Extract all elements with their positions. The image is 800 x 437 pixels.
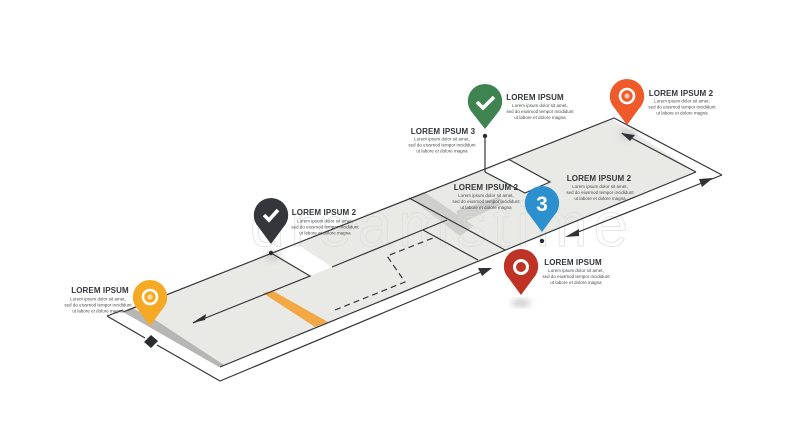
label: dark pin: ut labore et dolore magna bbox=[299, 230, 351, 236]
label: centre plot: Lorem ipsum dolor sit amet, bbox=[458, 193, 514, 198]
label: yellow pin: LOREM IPSUM bbox=[71, 286, 129, 295]
label: yellow pin: ut labore et dolore magna bbox=[72, 308, 124, 314]
label: lorem ipsum 3: Lorem ipsum dolor sit amet, bbox=[414, 136, 470, 142]
soft shadow near dark pin bbox=[265, 251, 281, 261]
label: orange pin: LOREM IPSUM 2 bbox=[649, 89, 714, 98]
label: red pin: sed do eiusmod tempor incididunt bbox=[542, 274, 610, 279]
watermark outline text: dreamstime bbox=[250, 191, 630, 260]
label: right plot: sed do eiusmod tempor incididunt bbox=[566, 190, 634, 195]
label: right plot bbox=[566, 174, 634, 201]
soft shadow near orange pin bbox=[619, 128, 637, 140]
label: dark pin: Lorem ipsum dolor sit amet, bbox=[297, 218, 353, 224]
dashed route bbox=[335, 238, 433, 310]
label: green pin: LOREM IPSUM bbox=[506, 93, 564, 102]
panel: floor plan surface bbox=[123, 119, 696, 367]
label: orange pin: Lorem ipsum dolor sit amet, bbox=[654, 98, 710, 104]
label: orange pin: sed do eiusmod tempor incididunt bbox=[648, 104, 716, 110]
label: right plot: Lorem ipsum dolor sit amet, bbox=[572, 184, 628, 189]
label: red pin bbox=[542, 258, 610, 285]
label: green pin: ut labore et dolore magna bbox=[514, 115, 566, 120]
shadow under red pin bbox=[511, 300, 531, 306]
label: red pin: Lorem ipsum dolor sit amet, bbox=[548, 268, 604, 273]
label: orange pin: ut labore et dolore magna bbox=[656, 110, 708, 116]
label: lorem ipsum 3 bbox=[408, 127, 476, 154]
grey ramp at left end bbox=[123, 308, 224, 367]
arrowheads bbox=[192, 133, 713, 323]
label: lorem ipsum 3: ut labore et dolore magna bbox=[416, 148, 468, 154]
label: right plot: LOREM IPSUM 2 bbox=[567, 174, 632, 183]
label: lorem ipsum 3: sed do eiusmod tempor incididunt bbox=[408, 142, 476, 148]
pin: dark check bbox=[254, 198, 288, 244]
label: yellow pin: sed do eiusmod tempor incididunt bbox=[64, 302, 132, 308]
label: lorem ipsum 3: LOREM IPSUM 3 bbox=[411, 127, 476, 136]
pin: blue number three: 3 bbox=[536, 193, 548, 216]
pin: orange target bbox=[610, 79, 644, 125]
label: centre plot: LOREM IPSUM 2 bbox=[454, 183, 519, 192]
label: yellow pin: Lorem ipsum dolor sit amet, bbox=[70, 296, 126, 302]
connector from green pin bbox=[483, 134, 487, 172]
pin: red target bbox=[504, 249, 538, 295]
label: centre plot bbox=[452, 183, 520, 210]
label: right plot: ut labore et dolore magna bbox=[574, 196, 626, 201]
label: green pin bbox=[506, 93, 574, 120]
white band left bbox=[271, 243, 332, 276]
dot under blue pin bbox=[540, 239, 544, 243]
diamond marker bbox=[144, 335, 158, 348]
label: red pin: LOREM IPSUM bbox=[544, 258, 602, 267]
dot under dark pin bbox=[269, 251, 273, 255]
grey cross walkway bbox=[410, 192, 504, 236]
label: dark pin: sed do eiusmod tempor incididunt bbox=[291, 224, 359, 230]
label: green pin: Lorem ipsum dolor sit amet, bbox=[512, 103, 568, 108]
label: centre plot: ut labore et dolore magna bbox=[460, 205, 512, 210]
white room top bbox=[485, 159, 550, 193]
label: dark pin bbox=[291, 208, 359, 236]
label: red pin: ut labore et dolore magna bbox=[550, 280, 602, 285]
pin: blue number three bbox=[525, 186, 559, 232]
pin: yellow target bbox=[133, 280, 167, 326]
label: centre plot: sed do eiusmod tempor incididunt bbox=[452, 199, 520, 204]
orange band bbox=[263, 291, 328, 327]
label: green pin: sed do eiusmod tempor incididunt bbox=[506, 109, 574, 114]
label: yellow pin bbox=[64, 286, 132, 314]
plan outlines bbox=[107, 118, 722, 381]
label: orange pin bbox=[648, 89, 716, 116]
label: dark pin: LOREM IPSUM 2 bbox=[292, 208, 357, 217]
pin: green check bbox=[468, 84, 502, 129]
